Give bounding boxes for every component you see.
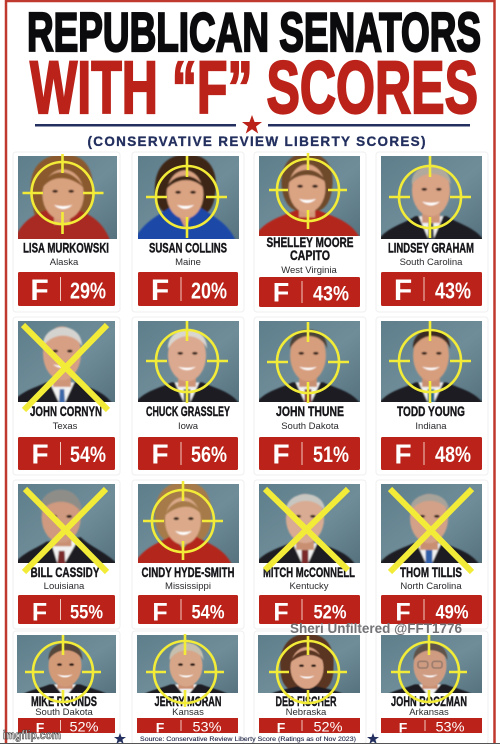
- crosshair target: [146, 634, 224, 707]
- state: Maine: [175, 257, 201, 268]
- score badge: 43%: [313, 282, 349, 306]
- crosshair target: [146, 321, 228, 403]
- score badge: 20%: [191, 278, 227, 304]
- state: North Carolina: [400, 581, 462, 592]
- score badge: 51%: [313, 442, 349, 467]
- name: MITCH McCONNELL: [263, 564, 355, 580]
- name: JOHN THUNE: [276, 403, 344, 419]
- crosshair target: [146, 156, 227, 238]
- name: TODD YOUNG: [397, 403, 465, 419]
- card: Bill Cassidy: [9, 480, 124, 629]
- portrait: Jerry Moran: [137, 635, 238, 693]
- score badge: [18, 718, 115, 736]
- yellow X: [390, 489, 472, 572]
- card: Lisa Murkowski: [11, 152, 120, 312]
- score badge: 48%: [435, 442, 471, 467]
- portrait: Lisa Murkowski: [18, 156, 117, 239]
- name: JOHN CORNYN: [30, 403, 102, 419]
- score badge: [381, 595, 482, 626]
- name: BILL CASSIDY: [30, 564, 100, 580]
- card: John Thune: [252, 317, 366, 475]
- portrait: Mitch McConnell: [259, 484, 360, 563]
- score badge: F: [31, 438, 49, 470]
- score badge: F: [151, 438, 169, 470]
- portrait: Thom Tillis: [381, 484, 482, 563]
- score badge: F: [32, 598, 47, 626]
- score badge: F: [399, 720, 408, 736]
- portrait: John Thune: [259, 321, 360, 402]
- card: Susan Collins: [132, 152, 244, 312]
- score badge: [381, 272, 482, 307]
- score badge: 52%: [70, 720, 98, 734]
- score badge: 54%: [192, 602, 225, 624]
- watermark: Sheri Unfiltered: Sheri Unfiltered @FFT1776: [290, 621, 462, 636]
- source text: Source: Conservative Review Liberty Score (Ratings as of Nov 2023): [140, 736, 356, 743]
- name: JERRY MORAN: [154, 693, 222, 709]
- score badge: [259, 718, 360, 736]
- name: SHELLEY MOORE: [266, 234, 354, 250]
- card: Shelley Moore Capito: [252, 152, 366, 312]
- state: Nebraska: [286, 707, 327, 718]
- yellow X: [24, 489, 107, 572]
- state: West Virginia: [281, 265, 338, 276]
- source footer: [114, 733, 356, 744]
- portrait: John Boozman: [381, 635, 482, 693]
- portrait: Susan Collins: [138, 156, 239, 239]
- name: SUSAN COLLINS: [149, 240, 227, 256]
- yellow X: [23, 325, 108, 410]
- state: Louisiana: [44, 581, 85, 592]
- score badge: F: [273, 278, 289, 308]
- score badge: F: [30, 274, 49, 307]
- state: Alaska: [50, 257, 79, 268]
- score badge: 29%: [70, 278, 106, 304]
- card: Mitch McConnell: [251, 480, 366, 629]
- state: Mississippi: [165, 581, 211, 592]
- score badge: F: [152, 598, 168, 626]
- score badge: [18, 437, 115, 470]
- state: Kentucky: [289, 581, 329, 592]
- name: CHUCK GRASSLEY: [146, 403, 230, 419]
- card: Cindy Hyde-Smith: [131, 480, 244, 629]
- crosshair target: [389, 321, 471, 403]
- portrait: Chuck Grassley: [138, 321, 239, 402]
- name: [266, 234, 354, 263]
- score badge: 43%: [435, 278, 471, 304]
- score badge: F: [273, 598, 289, 626]
- score badge: [18, 272, 115, 307]
- score badge: [18, 595, 115, 626]
- crosshair target: [143, 481, 223, 560]
- name: MIKE ROUNDS: [31, 693, 97, 709]
- score badge: F: [394, 274, 412, 307]
- state: Kansas: [172, 707, 204, 718]
- score badge: F: [277, 720, 286, 736]
- score badge: [381, 437, 482, 470]
- name: THOM TILLIS: [400, 564, 462, 580]
- score badge: [259, 277, 360, 308]
- score badge: [259, 437, 360, 470]
- score badge: 53%: [436, 720, 464, 734]
- score badge: 53%: [192, 720, 222, 734]
- subtitle: (CONSERVATIVE REVIEW LIBERTY SCORES): [88, 134, 426, 149]
- state: Texas: [53, 421, 78, 432]
- score badge: F: [272, 438, 290, 470]
- card: John Cornyn: [8, 317, 120, 475]
- score badge: F: [36, 720, 45, 736]
- card: John Boozman: [376, 631, 488, 744]
- name: CAPITO: [290, 247, 330, 263]
- crosshair target: [267, 322, 349, 403]
- state: Arkansas: [409, 707, 449, 718]
- title rule with star: [35, 115, 470, 134]
- portrait: Shelley Moore Capito: [259, 156, 360, 236]
- score badge: F: [156, 720, 165, 736]
- card: Lindsey Graham: [375, 152, 488, 312]
- score badge: F: [395, 598, 411, 626]
- score badge: 55%: [70, 602, 103, 624]
- score badge: F: [394, 438, 412, 470]
- name: CINDY HYDE-SMITH: [142, 564, 234, 580]
- state: South Dakota: [281, 421, 339, 432]
- crosshair target: [22, 154, 104, 234]
- score badge: [138, 272, 238, 307]
- crosshair target: [269, 636, 347, 703]
- crosshair target: [25, 635, 101, 702]
- score badge: 54%: [70, 442, 106, 467]
- name: LISA MURKOWSKI: [23, 240, 109, 256]
- score badge: 52%: [314, 602, 347, 624]
- name: DEB FISCHER: [276, 693, 336, 709]
- crosshair target: [389, 156, 471, 238]
- card: Chuck Grassley: [131, 317, 244, 475]
- portrait: Mike Rounds: [17, 635, 116, 693]
- portrait: Cindy Hyde-Smith: [138, 484, 239, 563]
- score badge: 52%: [314, 720, 342, 734]
- card: Thom Tillis: [375, 480, 488, 629]
- card: Mike Rounds: [13, 631, 120, 744]
- watermark: imgflip.com: imgflip.com: [3, 730, 61, 742]
- crosshair target: [391, 635, 467, 702]
- portrait: Bill Cassidy: [18, 484, 115, 563]
- card: Todd Young: [375, 317, 488, 475]
- state: Indiana: [415, 421, 447, 432]
- score badge: [137, 718, 238, 736]
- bottom edge line: [0, 743, 500, 744]
- score badge: 49%: [436, 602, 469, 624]
- score badge: 56%: [191, 442, 227, 467]
- left star: [114, 733, 126, 744]
- score badge: [138, 595, 238, 626]
- portrait: Deb Fischer: [258, 635, 360, 693]
- score badge: F: [151, 274, 169, 307]
- score badge: [138, 437, 238, 470]
- card: Jerry Moran: [132, 631, 244, 744]
- score badge: [381, 718, 482, 736]
- state: Iowa: [178, 421, 199, 432]
- crosshair target: [269, 153, 347, 229]
- state: South Dakota: [35, 707, 93, 718]
- portrait: Todd Young: [381, 321, 482, 402]
- yellow X: [265, 489, 348, 570]
- right star: [367, 733, 379, 744]
- card: Deb Fischer: [254, 631, 366, 744]
- score badge: [259, 595, 360, 626]
- portrait: John Cornyn: [18, 321, 115, 402]
- state: South Carolina: [400, 257, 463, 268]
- portrait: Lindsey Graham: [381, 156, 482, 239]
